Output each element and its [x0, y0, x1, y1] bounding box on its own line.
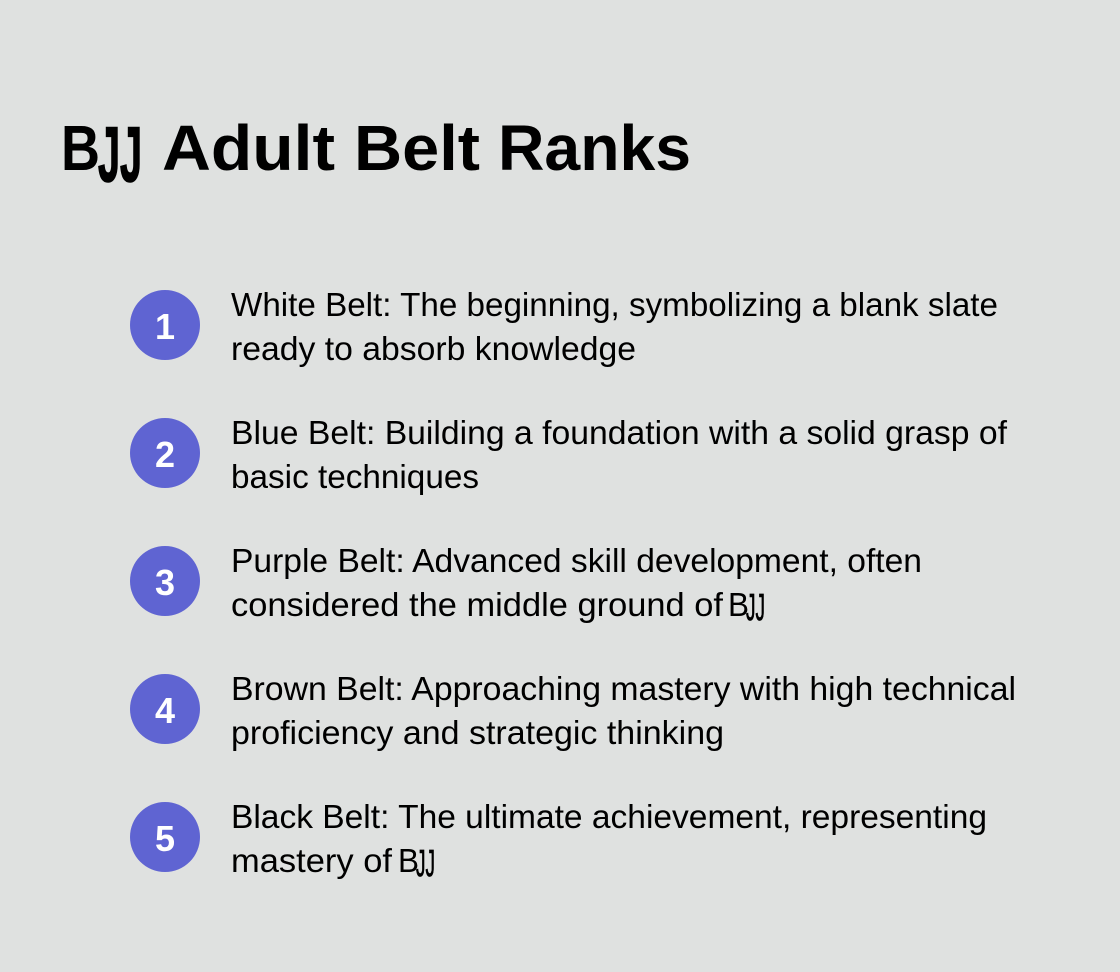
text: Purple Belt: Purple Belt: Advanced skill development, often: [231, 542, 922, 579]
number badge 3: 3: [155, 562, 175, 603]
number badge 1: 1: [155, 306, 175, 347]
list item 3: Purple Belt: [130, 542, 922, 629]
text: Blue Belt: [231, 414, 1008, 495]
text: White Belt: [231, 286, 998, 367]
title: B: [61, 112, 100, 184]
text: Brown Belt: [231, 670, 1016, 751]
text: White Belt: ready to absorb knowledge: [231, 330, 636, 367]
text: Black Belt: B: [398, 842, 419, 879]
number badge 4: 4: [155, 690, 175, 731]
number badge 4: [130, 674, 200, 744]
text: Black Belt: JJ: [416, 843, 435, 885]
text: Brown Belt: Brown Belt: Approaching mastery with high technical: [231, 670, 1016, 707]
list item 5: Black Belt: [130, 798, 987, 885]
title: JJ: [98, 110, 142, 198]
number badge 2: [130, 418, 200, 488]
list item 1: White Belt: [130, 286, 998, 367]
number badge 2: 2: [155, 434, 175, 475]
text: Blue Belt: Blue Belt: Building a foundation with a solid grasp of: [231, 414, 1008, 451]
title: Belt: [354, 112, 480, 184]
number badge 5: [130, 802, 200, 872]
text: Brown Belt: proficiency and strategic thinking: [231, 714, 724, 751]
text: White Belt: White Belt: The beginning, symbolizing a blank slate: [231, 286, 998, 323]
text: Black Belt: [231, 798, 987, 885]
text: Black Belt: Black Belt: The ultimate achievement, representing: [231, 798, 987, 835]
number badge 1: [130, 290, 200, 360]
text: Blue Belt: basic techniques: [231, 458, 479, 495]
text: Purple Belt: JJ: [746, 587, 765, 629]
text: Purple Belt: considered the middle ground of: [231, 586, 724, 623]
text: Black Belt: mastery of: [231, 842, 393, 879]
list item 4: Brown Belt: [130, 670, 1016, 751]
title: Adult: [162, 112, 335, 184]
list item 2: Blue Belt: [130, 414, 1008, 495]
title: Ranks: [498, 112, 691, 184]
text: Purple Belt: [231, 542, 922, 629]
number badge 5: 5: [155, 818, 175, 859]
text: Purple Belt: B: [728, 586, 749, 623]
number badge 3: [130, 546, 200, 616]
